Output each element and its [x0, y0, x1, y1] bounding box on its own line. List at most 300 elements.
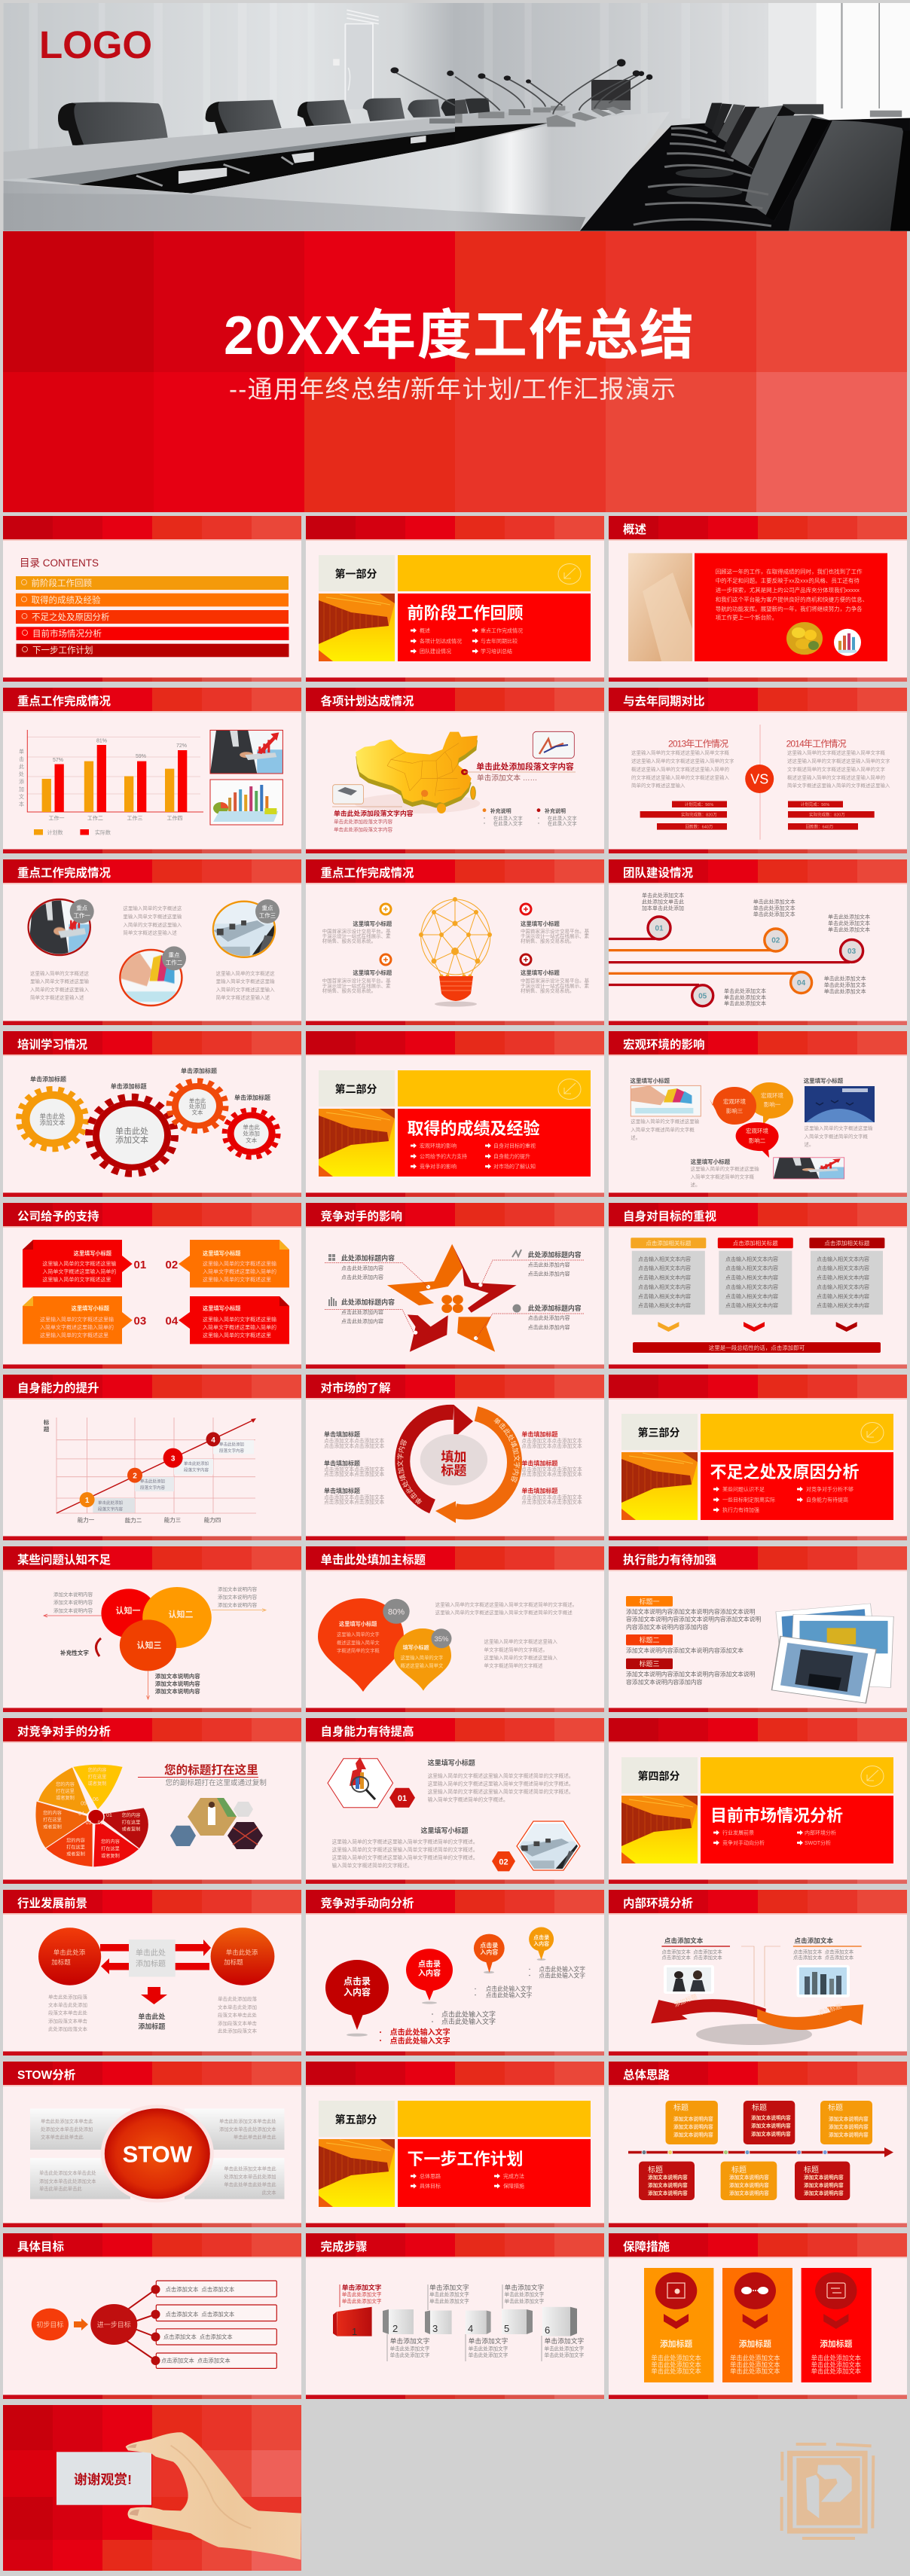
heading: 重点工作完成情况 — [17, 865, 111, 880]
axis labels: 题 — [44, 1426, 50, 1433]
value boxes: 单击此处添加 — [219, 1442, 244, 1448]
heading: 培训学习情况 — [17, 1037, 88, 1051]
pie heading: 您的标题打在这里 — [164, 1763, 258, 1777]
logo: LOGO — [39, 23, 152, 66]
part label: 第一部分 — [334, 568, 377, 580]
box 02 — [166, 1240, 289, 1287]
column 2013: 2013年工作情况 — [668, 738, 728, 749]
pie labels: 06 — [93, 1797, 99, 1802]
part label: 第二部分 — [334, 1083, 377, 1095]
callout upper — [465, 761, 576, 783]
shadows — [347, 1958, 546, 2037]
text block two: 这里输入简单的文字概述这里输入简单文字概述简单的文字概述。 — [332, 1854, 478, 1860]
pin smallest — [529, 1927, 554, 1960]
column 2014: 文字概述简单的文字概述这里输入简单的文字 — [787, 765, 886, 773]
section items: 自身能力的提升 — [493, 1152, 530, 1160]
arrows — [44, 1609, 266, 1699]
icon: arrow circle — [558, 563, 581, 584]
box 04: 入简单文字概述这里输入简单的 — [203, 1324, 276, 1330]
target boxes: 点击添加文本 点击添加文本 — [161, 2358, 231, 2364]
pie chart — [35, 1764, 149, 1867]
item bottom: 入简单文字概述简单的文字概 — [691, 1174, 755, 1180]
gear titles: 单击添加标题 — [30, 1076, 66, 1083]
pin small: 概述这里输入简单文 — [401, 1662, 444, 1669]
summary bar — [633, 1342, 881, 1353]
center badge: STOW — [123, 2141, 193, 2168]
step text bottom: 单击添加文字 — [469, 2336, 508, 2345]
column two: 点击输入相关文本内容 — [725, 1302, 778, 1309]
pin big: 这里输入简单的文字 — [337, 1631, 380, 1637]
notes: 添加文本说明内容 — [218, 1601, 258, 1608]
speech bubbles: 影响二 — [749, 1137, 766, 1144]
item top right: 入简单文字概述简单的文字概 — [805, 1133, 868, 1140]
panel: part four — [609, 1718, 907, 1884]
bar chart: 工作四 — [167, 815, 182, 821]
section items: 重点工作完成情况 — [481, 627, 523, 634]
card two: 单击此处添加文本 — [730, 2355, 780, 2362]
pin big: 这里填写小标题 — [339, 1621, 377, 1627]
hexagon 02 — [492, 1851, 515, 1871]
top boxes: 添加文本说明内容 — [751, 2130, 791, 2138]
item top right: 这里输入简单的文字概述这里输 — [805, 1125, 873, 1131]
heading: 某些问题认知不足 — [17, 1552, 111, 1567]
text item upper left — [322, 920, 392, 945]
heading: 自身对目标的重视 — [623, 1210, 717, 1223]
pie labels: 02 — [98, 1821, 103, 1826]
bottom boxes: 添加文本说明内容 — [804, 2190, 844, 2196]
cover title: 20XX年度工作总结 — [224, 306, 694, 366]
chart legend: 计划数 — [47, 829, 63, 836]
bar chart: 72% — [176, 743, 187, 749]
gear labels: 单击此 — [243, 1123, 260, 1131]
heading: 对竞争对手的分析 — [17, 1724, 111, 1738]
card one — [644, 2268, 713, 2382]
bullet notes top: 点击此处输入文字 — [539, 1965, 585, 1973]
red text box — [695, 553, 887, 661]
panel: light bulb — [306, 859, 604, 1025]
gear titles: 单击添加标题 — [234, 1094, 270, 1101]
bottom notes: 添加文本说明内容 — [155, 1672, 200, 1680]
icons plus — [380, 904, 531, 965]
cubes: 1 — [352, 2326, 357, 2337]
panel: part five — [306, 2062, 604, 2227]
card three: 单击此处添加文本 — [811, 2355, 861, 2362]
hexagon photos — [170, 1798, 263, 1849]
panel: key work circles — [3, 859, 301, 1025]
arrow — [74, 2318, 88, 2330]
right note — [793, 1936, 862, 1961]
heading: 宏观环境的影响 — [623, 1037, 705, 1051]
item lower right: 点击此处添加内容 — [528, 1323, 570, 1330]
text block two: 输入简单文字概述简单的文字概述。 — [332, 1862, 413, 1869]
panel: part three — [609, 1375, 907, 1540]
card three — [802, 2268, 872, 2382]
speech bubbles: 宏观环境 — [723, 1097, 746, 1105]
box 03: 这里输入简单的文字概述这里输 — [40, 1316, 114, 1323]
card: 谢谢观赏! — [74, 2471, 132, 2487]
gear orange — [19, 1089, 86, 1149]
column three: 点击输入相关文本内容 — [817, 1274, 869, 1281]
item top right — [512, 1250, 582, 1277]
right paragraph: 文本单击此处添加 — [218, 2004, 257, 2010]
bottom label: 单击此处 — [138, 2013, 165, 2020]
panel: internal environment — [609, 1890, 907, 2056]
column three: 点击添加相关标题 — [824, 1239, 870, 1247]
heading: 执行能力有待加强 — [623, 1552, 717, 1567]
timeline arrow — [628, 2147, 893, 2157]
contents bars: 下一步工作计划 — [32, 646, 93, 655]
bullet notes top: 点击此处输入文字 — [539, 1971, 585, 1979]
right text blocks: 单击填加标题 — [521, 1487, 557, 1494]
text block one: 输入简单文字概述简单的文字概述。 — [428, 1796, 508, 1803]
cards: 单击此单击此单击此 — [234, 2133, 276, 2141]
bullet notes upper: 点击此处输入文字 — [486, 1991, 533, 1998]
left text blocks: 点击添加文本点击添加文本 — [324, 1470, 385, 1478]
center label — [420, 1434, 487, 1485]
pin smallest: 入内容 — [533, 1940, 549, 1947]
item bottom — [691, 1158, 844, 1188]
cards: 此文本 — [262, 2189, 276, 2196]
column two — [718, 1238, 793, 1332]
legend notes: 在此录入文字 — [548, 819, 577, 827]
team notes: 单击此处添加文本 — [753, 898, 795, 905]
hand — [126, 2432, 301, 2559]
text item upper left: 中国首家演示设计交易平台。基 — [322, 928, 391, 934]
panel: overview — [609, 516, 907, 682]
value boxes: 段落文字内容 — [219, 1448, 245, 1454]
text item lower right: 这里填写小标题 — [521, 969, 560, 976]
pin small: 点击录 — [480, 1942, 498, 1949]
right text blocks: 点击添加文本点击添加文本 — [521, 1494, 582, 1500]
item bottom: 这里输入简单的文字概述这里输 — [691, 1165, 759, 1172]
bottom boxes: 标题 — [731, 2165, 747, 2175]
pie heading: 您的副标题打在这里或通过复制 — [166, 1778, 267, 1787]
circle photo two — [120, 946, 186, 1007]
step text top: 单击添加文字 — [342, 2283, 382, 2291]
overlapping circles: 认知三 — [137, 1640, 161, 1650]
card one: 添加标题 — [660, 2338, 692, 2349]
column two: 点击输入相关文本内容 — [725, 1265, 778, 1271]
box 03 — [23, 1296, 146, 1344]
card three: 单击此处添加文本 — [811, 2367, 861, 2375]
left paragraph: 添加段落文本单击 — [48, 2017, 87, 2025]
panel: team building — [609, 859, 907, 1025]
text item lower right: 材销售、服务交易系统。 — [521, 987, 574, 994]
section items: 公司给予的大力支持 — [420, 1152, 467, 1160]
trend line and nodes: 2 — [133, 1472, 137, 1481]
legend notes: 补充说明 — [490, 807, 511, 814]
bullet notes top — [529, 1965, 585, 1979]
pie labels: 打在这里 — [43, 1817, 62, 1823]
item bottom: 述。 — [691, 1181, 701, 1188]
step text top: 单击此处添加文字 — [429, 2291, 469, 2297]
text block right: 简单文字概述这里输入述 — [216, 994, 270, 1000]
bottom notes: 添加文本说明内容 — [155, 1687, 200, 1695]
pie labels: 打在这里 — [56, 1788, 75, 1794]
bottom boxes: 添加文本说明内容 — [648, 2181, 688, 2189]
item top left: 点击此处添加内容 — [341, 1265, 383, 1271]
card three: 添加标题 — [820, 2338, 853, 2349]
cards: 单击此处添加文本单击此处 — [219, 2118, 276, 2124]
text item upper left: 这里填写小标题 — [353, 920, 392, 927]
section items: 一些目标制定脱离实际 — [722, 1496, 775, 1503]
section title: 前阶段工作回顾 — [407, 604, 524, 622]
contents bars: 前阶段工作回顾 — [32, 578, 92, 588]
cycle arrows: 单击此处填加文字内容 — [494, 1418, 520, 1482]
pin large: 点击录 — [344, 1975, 371, 1987]
text right top: 这里输入简单的文字概述这里输入简单文字概述简单的文字概述 — [435, 1609, 573, 1616]
bottom boxes — [639, 2162, 850, 2200]
legend notes — [483, 807, 577, 827]
item top left: 点击此处添加内容 — [341, 1274, 383, 1280]
text right top: 这里输入简单的文字概述这里输入简单文字概述简单的文字概述。 — [435, 1601, 577, 1607]
timeline paths — [609, 939, 850, 985]
column one: 点击添加相关标题 — [646, 1239, 692, 1247]
notes: 添加文本说明内容 — [53, 1598, 93, 1606]
right note: 点击添加文本 点击添加文本 — [793, 1954, 854, 1961]
trend line and nodes: 1 — [85, 1497, 90, 1505]
start circle: 初步目标 — [36, 2320, 63, 2329]
VS badge — [745, 765, 774, 793]
text right lower: 这里输入简单的文字概述这里输入 — [484, 1637, 557, 1645]
box 03: 入简单文字概述这里输入简单的 — [40, 1324, 114, 1330]
gear dark red — [89, 1097, 175, 1174]
speech bubbles — [710, 1082, 793, 1158]
team notes: 单击此处添加文本 — [753, 911, 795, 917]
overview text: 中的不足和问题。主要反映于xx及xxx的风格、员工还有待 — [716, 577, 860, 584]
text block two — [332, 1827, 478, 1869]
pin medium: 入内容 — [418, 1968, 441, 1978]
section items: 各项计划达成情况 — [420, 637, 462, 645]
text block right: 里输入简单文字概述这里输 — [216, 978, 275, 984]
contents bars: 取得的成绩及经验 — [32, 595, 101, 606]
watermark stamp — [782, 2444, 873, 2538]
tag text: 添加文本说明内容添加文本说明内容添加文本说明 — [626, 1607, 756, 1615]
section items — [411, 627, 523, 655]
axis labels: 能力三 — [164, 1515, 181, 1523]
gear titles: 单击添加标题 — [181, 1067, 217, 1074]
pie labels: 01 — [106, 1813, 112, 1818]
speech bubbles: 影响一 — [764, 1100, 781, 1108]
cards: 文本单击此处单击此 — [41, 2133, 84, 2141]
pin big — [318, 1598, 410, 1692]
card two: 单击此处添加文本 — [730, 2367, 780, 2375]
section items — [713, 1829, 836, 1846]
bottom notes: 添加文本说明内容 — [155, 1680, 200, 1687]
pie labels: 打在这里 — [88, 1774, 106, 1780]
heading: 对市场的了解 — [321, 1381, 391, 1395]
text block one: 这里输入简单的文字概述这里输入简单文字概述简单的文字概述。 — [428, 1781, 574, 1787]
legend notes: 在此录入文字 — [548, 815, 577, 821]
box 01 — [23, 1240, 146, 1287]
panel: team building: 05 — [698, 993, 707, 1000]
pie labels: 您的内容 — [88, 1767, 106, 1773]
panel: ability growth — [3, 1375, 301, 1540]
team notes: 加本单击此处添加 — [642, 905, 684, 911]
column two: 点击添加相关标题 — [733, 1239, 778, 1247]
item top right: 这里填写小标题 — [804, 1077, 844, 1085]
pin smallest: 点击录 — [533, 1934, 549, 1940]
panel: team building: 02 — [771, 937, 780, 945]
panel: steps — [306, 2233, 604, 2399]
cards: 单击此处单击此处单击此 — [224, 2181, 276, 2187]
section items: 竞争对手动向分析 — [722, 1839, 765, 1846]
pie labels: 您的内容 — [43, 1810, 62, 1816]
item lower left: 点击此处添加内容 — [341, 1318, 383, 1324]
heading: 自身能力的提升 — [17, 1381, 99, 1395]
step text top: 单击此处添加文字 — [342, 2291, 382, 2297]
photo: conference room left half — [4, 3, 455, 231]
team notes — [642, 892, 870, 1006]
text block top: 入简单的文字概述这里输入 — [123, 921, 182, 928]
column three: 点击输入相关文本内容 — [817, 1256, 869, 1262]
section title: 取得的成绩及经验 — [407, 1119, 540, 1138]
step text top: 单击添加文字 — [505, 2283, 544, 2291]
item bottom: 这里填写小标题 — [691, 1158, 731, 1165]
trend line and nodes: 3 — [171, 1455, 176, 1463]
text item upper right — [521, 920, 589, 945]
gear labels: 添加文本 — [115, 1134, 148, 1145]
bottom boxes: 添加文本说明内容 — [648, 2174, 688, 2181]
chart legend: 实际数 — [95, 829, 111, 836]
left text blocks: 点击添加文本点击添加文本 — [324, 1494, 385, 1500]
right text blocks: 点击添加文本点击添加文本 — [521, 1437, 582, 1444]
panel: pins percent — [306, 1546, 604, 1712]
axis labels: 能力二 — [125, 1516, 142, 1524]
shadow — [696, 2024, 812, 2045]
bar chart: 工作一 — [48, 815, 65, 821]
top boxes: 添加文本说明内容 — [673, 2115, 713, 2123]
column 2013 — [631, 738, 734, 830]
heading: 总体思路 — [623, 2068, 670, 2082]
speech bubbles: 影响三 — [726, 1107, 743, 1115]
heading: 单击此处填加主标题 — [321, 1553, 426, 1567]
center box: 单击此处 — [136, 1948, 166, 1958]
text block one: 这里填写小标题 — [428, 1758, 475, 1767]
panel: execution — [609, 1546, 907, 1712]
pin large — [325, 1960, 389, 2030]
column 2013: 实际完成数：820万 — [681, 812, 717, 818]
text right lower: 这里输入简单的文字概述这里输入 — [484, 1654, 557, 1661]
bar chart: 工作三 — [127, 815, 143, 821]
hexagon photo bottom — [517, 1821, 580, 1870]
panel: specific goals — [3, 2233, 301, 2399]
left note: 点击添加文本 点击添加文本 — [661, 1948, 722, 1955]
column two: 点击输入相关文本内容 — [725, 1293, 778, 1299]
bulb graphic — [419, 897, 492, 1006]
bullet notes bottom — [380, 2028, 450, 2046]
panel: overall thinking — [609, 2062, 907, 2227]
overview text: 和我们这个平台能为客户提供良好的商机和快捷方便的信息、 — [716, 595, 868, 603]
right text blocks: 点击添加文本点击添加文本 — [521, 1442, 582, 1449]
title tags: 标题二 — [639, 1636, 660, 1644]
gear labels — [39, 1097, 260, 1145]
section items — [411, 2172, 524, 2190]
box 01: 01 — [134, 1259, 146, 1271]
right ellipse: 单击此处添 — [226, 1949, 258, 1956]
text block top: 里输入简单文字概述这里输 — [123, 913, 182, 920]
box 04: 这里输入简单的文字概述这里 — [203, 1332, 271, 1338]
next circle: 进一步目标 — [97, 2320, 131, 2329]
cards: 单击此处添加文本单击此 — [41, 2118, 93, 2124]
team notes: 单击此处添加文本 — [724, 1000, 766, 1006]
pin small: 入内容 — [480, 1948, 498, 1955]
text block top: 简单文字概述这里输入述 — [123, 929, 177, 935]
section items: 与去年同期比较 — [481, 637, 518, 645]
item top left — [328, 1253, 395, 1280]
column 2014 — [786, 738, 890, 830]
item lower left: 此处添加标题内容 — [341, 1298, 395, 1306]
trend line and nodes — [56, 1418, 256, 1513]
cycle arrows — [395, 1404, 522, 1523]
text right lower: 单文字概述简单的文字概述。 — [484, 1647, 548, 1653]
image: businessman — [210, 730, 282, 774]
bullet notes mid: 点击此处输入文字 — [441, 2010, 496, 2019]
bottom boxes: 添加文本说明内容 — [729, 2181, 769, 2189]
top boxes: 添加文本说明内容 — [673, 2123, 713, 2130]
column 2014: 述这里输入简单的文字概述这里输入简单的文字 — [787, 758, 890, 764]
ribbon labels — [673, 1992, 842, 2017]
overview text — [716, 568, 868, 621]
text block top — [123, 905, 182, 935]
image: colored bars — [834, 629, 861, 656]
contents bars: 目前市场情况分析 — [32, 628, 102, 639]
icon: arrow circle — [861, 1422, 884, 1443]
down arrow — [141, 1987, 167, 2004]
section items: 自身对目标的重视 — [493, 1142, 536, 1149]
heading: 公司给予的支持 — [17, 1209, 99, 1223]
item top left: 这里填写小标题 — [630, 1077, 670, 1085]
bottom boxes: 添加文本说明内容 — [804, 2174, 844, 2181]
text item upper left: 材销售、服务交易系统。 — [322, 937, 376, 945]
section items: 自身能力有待提高 — [806, 1496, 848, 1503]
part label: 第五部分 — [334, 2114, 377, 2126]
column 2014: 简单文字概述这里输入简单的文字概述这里输入 — [787, 782, 890, 789]
column one — [631, 1238, 706, 1332]
top boxes: 标题 — [828, 2103, 843, 2112]
column three: 点击输入相关文本内容 — [817, 1302, 869, 1309]
pie labels: 您的内容 — [56, 1781, 75, 1787]
ribbon arrows — [651, 1999, 863, 2030]
right text blocks: 点击添加文本点击添加文本 — [521, 1499, 582, 1505]
tag text: 容添加文本说明内容添加内容 — [626, 1678, 703, 1686]
notes: 添加文本说明内容 — [53, 1607, 93, 1613]
team notes: 单击此处添加文本 — [824, 975, 866, 982]
bar chart: 单击此处添加文本 — [18, 748, 24, 809]
text item lower right — [521, 969, 589, 994]
text block left: 入简单的文字概述这里输入 — [30, 986, 89, 993]
panel: part one — [306, 516, 604, 682]
panel: competitor analysis — [3, 1718, 301, 1884]
cubes: 5 — [504, 2323, 509, 2334]
text block right — [216, 970, 275, 1000]
card two: 添加标题 — [739, 2338, 771, 2349]
pin big: 概述这里输入简单文 — [337, 1639, 380, 1646]
side label: 补充性文字 — [60, 1649, 89, 1656]
stems — [340, 2285, 542, 2361]
box 04: 这里输入简单的文字概述这里输 — [203, 1316, 276, 1323]
VS badge: VS — [750, 771, 768, 786]
heading: 竞争对手的影响 — [321, 1209, 402, 1223]
section items: 团队建设情况 — [420, 648, 451, 655]
circle photo three: 工作三 — [259, 911, 276, 919]
overview text: 项工作更上一个新台阶。 — [716, 614, 777, 621]
box 01: 这里填写小标题 — [74, 1250, 111, 1256]
bottom label: 添加标题 — [138, 2022, 165, 2031]
text item upper right: 中国首家演示设计交易平台。基 — [521, 928, 589, 934]
column two: 点击输入相关文本内容 — [725, 1283, 778, 1290]
red mosaic background — [3, 231, 907, 512]
